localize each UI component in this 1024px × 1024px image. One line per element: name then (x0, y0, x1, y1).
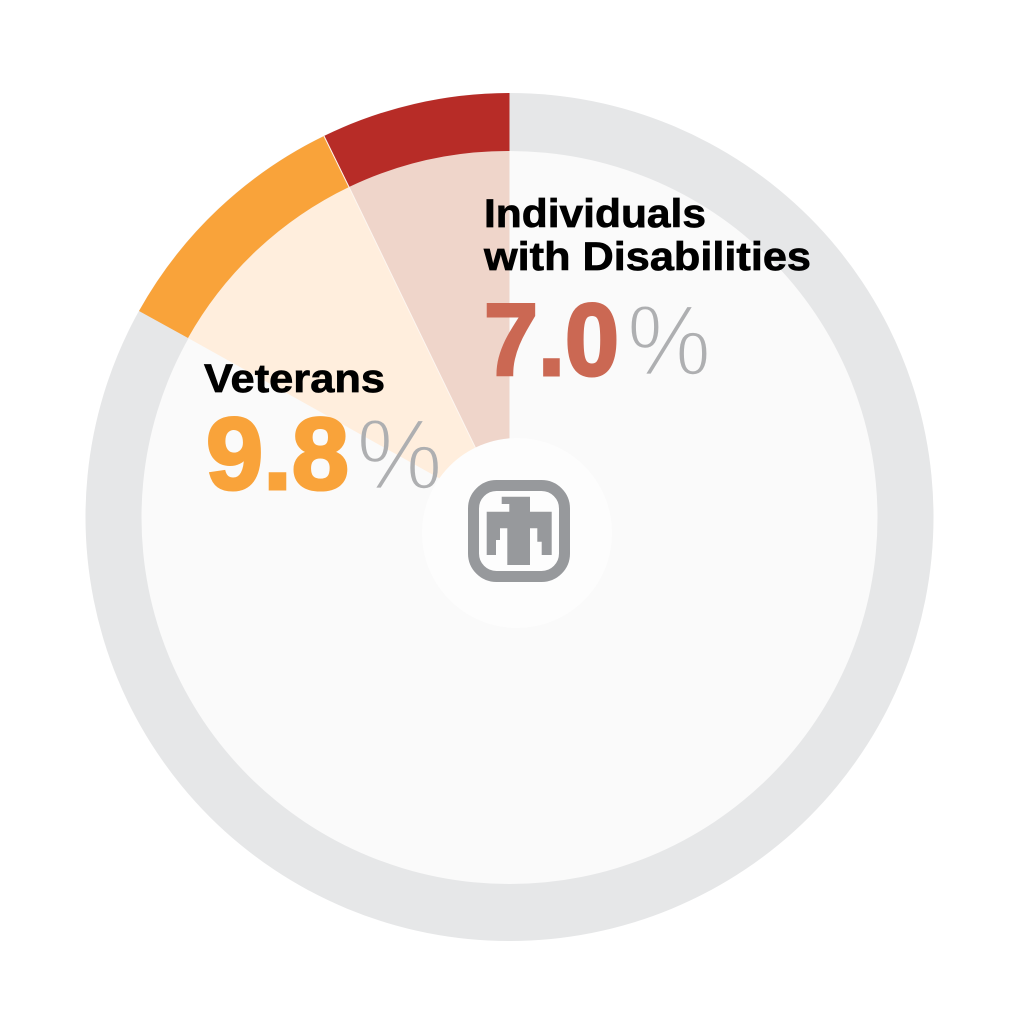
value: 7.0 percent (486, 302, 706, 378)
value: 7.0 percent: 7.0 (484, 283, 619, 397)
wedge: disabilities tint (349, 151, 510, 518)
outer ring track (86, 93, 934, 941)
ring segment: disabilities (324, 93, 510, 187)
heading: veterans: Veterans (204, 357, 385, 401)
wedge: veterans tint (188, 187, 510, 518)
label: disabilities (483, 198, 810, 378)
label: veterans (204, 364, 438, 492)
center circle (422, 438, 612, 628)
ring segment: veterans (139, 136, 349, 338)
heading: individuals with disabilities: with Disabilities (483, 235, 811, 279)
value: 9.8 percent: % (356, 399, 442, 511)
inner disc (142, 151, 878, 884)
wedge divider (324, 136, 477, 451)
value: 9.8 percent: 9.8 (206, 397, 349, 511)
heading: individuals with disabilities (483, 192, 811, 279)
value: 9.8 percent (208, 416, 438, 492)
donut chart infographic (86, 93, 934, 941)
value: 7.0 percent: % (627, 285, 711, 397)
icon: thunderbird logo (474, 486, 564, 576)
heading: individuals with disabilities: Individuals (484, 192, 706, 236)
